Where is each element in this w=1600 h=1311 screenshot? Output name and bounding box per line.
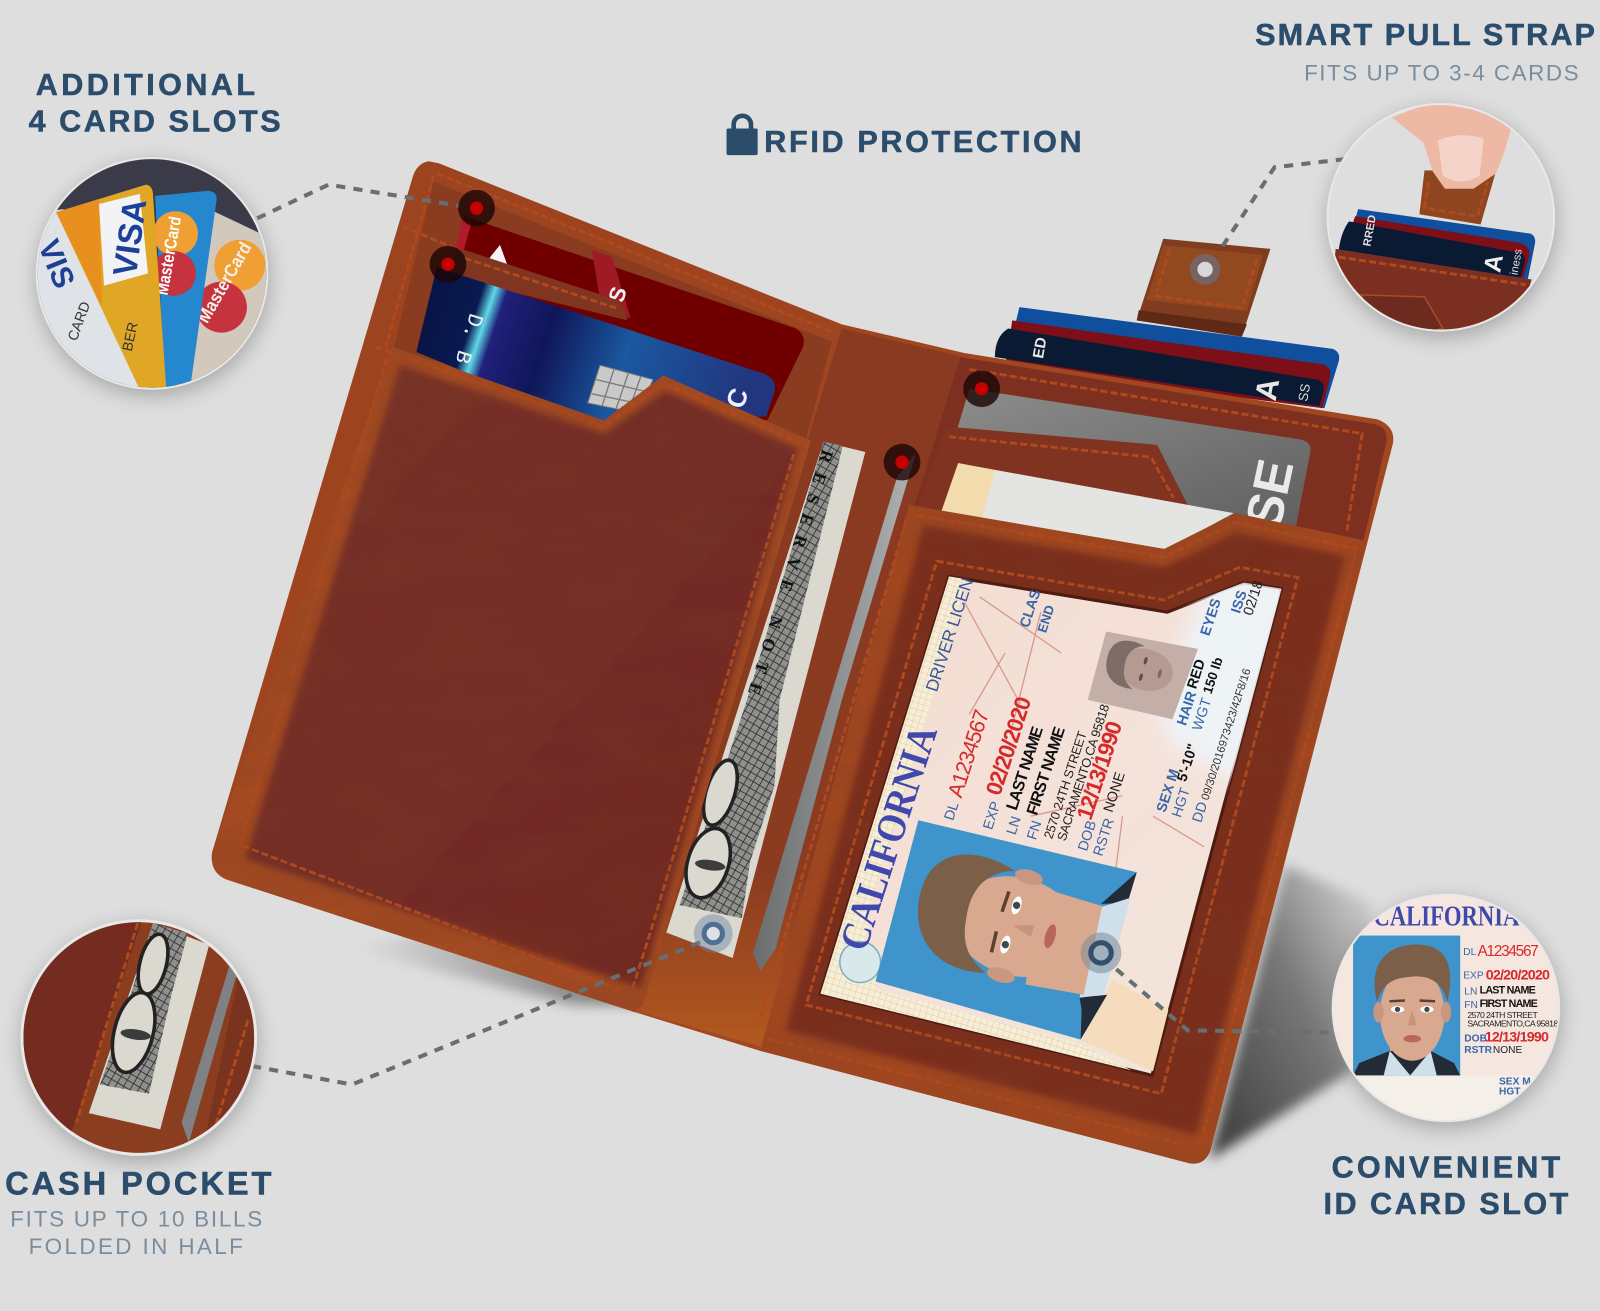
detail circle: ID card [1332,894,1562,1128]
yellow visa card [56,185,166,390]
ID card text: 12/13/1990 [1072,718,1127,823]
red card in upper slot: S [603,284,632,306]
heading: smart pull strap: FITS UP TO 3-4 CARDS [1304,61,1579,86]
bill ovals [697,756,744,829]
wallet cast shadow [352,865,1372,1160]
blue credit card: D. B [449,310,487,366]
leader line: pull strap [1221,159,1345,248]
leather outer stitches of left panel [386,173,832,347]
ID card text: ISS [1228,589,1251,615]
blue credit card: C [720,385,754,412]
title: RFID protection: RFID PROTECTION [764,125,1082,159]
bill [89,923,209,1129]
heading: cash pocket [5,1165,271,1259]
ID card text: DRIVER LICEN [922,575,977,694]
ID text in circle: SEX M [1499,1077,1531,1088]
ID card text: CALIFORNIA [831,719,946,956]
dark leather pocket [23,922,142,1132]
ID card text: WGT [1190,696,1215,733]
detail circle: cash pocket [20,918,265,1162]
heading: additional 4 card slots: ADDITIONAL [36,68,255,102]
leader line: card slots [257,185,461,218]
ID card text: 2570 24TH STREET [1041,729,1090,841]
ID text in circle: LAST NAME [1480,985,1536,997]
beige mastercard [176,212,266,385]
ID card text: HAIR [1174,689,1201,728]
ID text in circle: DOB [1464,1034,1487,1045]
ID card text: FIRST NAME [1023,724,1069,817]
blue and black cards: iness [1508,248,1525,276]
blue credit card [416,267,775,428]
hotspot: upper card slot [458,190,495,226]
ID card text: DOB [1075,819,1100,853]
ID card text: 02/18 [1241,579,1267,617]
hotspot: strap [1190,254,1220,285]
heading: smart pull strap [1255,18,1595,86]
folded cash bill [666,442,865,958]
wallet [204,161,1408,1173]
card chip [588,365,653,413]
heading: smart pull strap: SMART PULL STRAP [1255,18,1595,52]
heading: cash pocket: FOLDED IN HALF [29,1234,243,1259]
ID text in circle: LN [1464,987,1477,998]
right front ID pocket [760,505,1366,1164]
ID text in circle: EXP [1463,970,1484,981]
blue and black cards [1339,209,1535,281]
heading: cash pocket: CASH POCKET [5,1165,271,1202]
strap tab [1419,170,1496,224]
ID card text: NONE [1101,770,1129,814]
red card in upper slot [434,216,804,420]
ID card text: END [1035,603,1058,634]
cards sticking out behind wallet: ED [1030,336,1050,360]
detail circle: card slots [31,153,281,400]
ID text in circle: RSTR [1464,1045,1493,1056]
icon: padlock [727,116,758,155]
heading: cash pocket: FITS UP TO 10 BILLS [10,1206,262,1231]
cards sticking out behind wallet: A [1249,376,1286,403]
ID card text: RSTR [1091,816,1118,858]
ID text in circle: DL [1463,947,1477,958]
ID card text: DD [1190,800,1211,825]
ID card text: CLAS [1017,588,1044,630]
ID card text: EYES [1198,597,1225,638]
blue and black cards: A [1479,252,1509,274]
ID text in circle [1373,901,1558,1098]
wallet outer body [212,161,1393,1164]
hotspot: cash [694,914,733,953]
heading: additional 4 card slots: 4 CARD SLOTS [29,105,281,139]
white visa card [38,209,146,388]
large ID portrait [876,820,1137,1040]
ID card text: 150 lb [1200,655,1226,696]
ID card text [831,575,1267,956]
ID text in circle: 02/20/2020 [1486,967,1550,983]
upper slot leather lip [444,249,628,320]
yellow visa card: VISA [107,197,154,279]
spine [633,329,964,1051]
ID text in circle: 2570 24TH STREET [1467,1010,1538,1020]
ID card text: SACRAMENTO,CA 95818 [1054,702,1112,843]
leader line: cash pocket [252,941,704,1085]
hand with nail [1392,102,1514,189]
folded cash bill: RESERVE NOTE [744,448,837,697]
ID text in circle: FIRST NAME [1480,998,1538,1010]
ID card text: 02/20/2020 [981,694,1036,798]
ID card text: A1234567 [943,707,994,800]
second card behind ID pocket [941,463,1234,551]
California ID card in window [816,571,1301,1081]
cards sticking out behind wallet: SS [1295,382,1313,402]
pull strap on wallet [1137,239,1270,337]
ID card text: LAST NAME [1003,724,1047,812]
ID card text: SEX M [1154,767,1183,814]
beige mastercard: MasterCard [192,238,256,326]
hotspot: ID [1081,932,1121,973]
left upper lining [393,182,832,439]
left front pocket [212,347,811,1012]
ID card text: 09/30/2016973423/42F8/16 [1200,667,1254,802]
ID text in circle: SACRAMENTO,CA 95818 [1467,1018,1558,1028]
heading: convenient ID card slot: ID CARD SLOT [1323,1187,1569,1221]
ID text in circle: FN [1464,1000,1478,1011]
ID text in circle: 12/13/1990 [1485,1030,1549,1046]
silver metal card: SE [1235,454,1305,533]
hotspot: second card slot [430,246,466,283]
ID card text: RED [1185,657,1209,691]
ID text in circle: NONE [1493,1045,1522,1056]
yellow visa card: BER [120,321,142,353]
engraved strip [680,442,843,918]
ID portrait in circle [1353,936,1460,1075]
ID text in circle: CALIFORNIA [1373,901,1520,932]
slit [182,965,237,1143]
card slit in spine [753,452,916,971]
ID card text: FN [1024,819,1045,842]
blue mastercard [151,191,217,390]
heading: additional 4 card slots [29,68,281,139]
cards sticking out behind wallet [995,307,1339,408]
leader line: ID slot [1116,969,1331,1032]
leather mottling [272,354,1358,1093]
ID card text: LN [1004,815,1025,837]
right upper back leather [913,357,1387,546]
silver metal card [939,389,1311,533]
ID text in circle: HGT [1499,1087,1521,1098]
right upper stitch [969,369,1362,531]
detail circle: pull strap [1327,102,1557,338]
ID card text: HGT [1169,786,1194,819]
ID card text: EXP [980,800,1004,832]
ID card text: 5'-10" [1174,742,1201,784]
heading: convenient ID card slot [1323,1150,1569,1221]
wallet leather in circle [1335,248,1532,330]
blue and black cards: RRED [1362,214,1379,247]
hotspot: side card slot [884,444,920,481]
blue mastercard: MasterCard [152,215,185,297]
hotspot: back card slot [963,370,1000,407]
heading: convenient ID card slot: CONVENIENT [1332,1150,1561,1184]
ID text in circle: A1234567 [1478,943,1539,960]
white visa card: CARD [65,300,94,343]
ID card text: DL [942,800,963,823]
ghost ID portrait [1088,632,1198,719]
white visa card: VIS [31,235,81,293]
inner right flap [916,426,1235,520]
